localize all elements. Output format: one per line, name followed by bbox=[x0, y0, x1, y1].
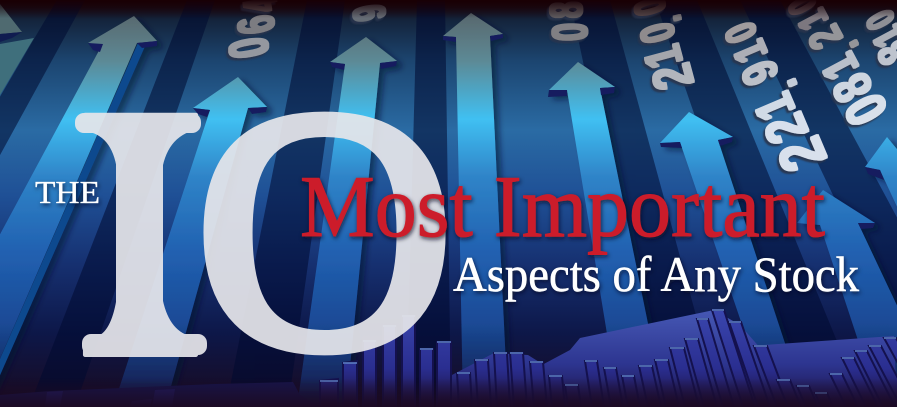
bars bbox=[320, 310, 897, 407]
number column 221.910: 1 bbox=[743, 84, 807, 128]
stock ticker numbers bbox=[216, 0, 897, 181]
number column 081.210: 1 bbox=[788, 2, 837, 37]
number column 081.210 bbox=[781, 0, 897, 136]
arrow 6 bbox=[660, 112, 806, 407]
number column 081.210: 2 bbox=[799, 17, 852, 57]
bar top caps bbox=[320, 310, 896, 393]
arrow: far left fragment bbox=[0, 4, 34, 95]
chart planes bbox=[450, 310, 897, 407]
heading: Aspects of Any Stock: Aspects of Any Stock bbox=[453, 246, 859, 302]
arrow 1 bbox=[0, 16, 157, 407]
number column 210.0: 1 bbox=[632, 39, 694, 74]
number column 08: 8 bbox=[541, 1, 593, 19]
top fade bbox=[0, 0, 897, 18]
number column 064: 6 bbox=[227, 11, 287, 38]
number column 9: 9 bbox=[344, 1, 397, 25]
arrow 2 bbox=[113, 77, 267, 407]
number column 221.910: 2 bbox=[751, 105, 821, 153]
arrow 5 bbox=[548, 62, 665, 407]
heading: THE: THE bbox=[35, 174, 100, 210]
number column far right bbox=[858, 3, 897, 73]
number column 08 bbox=[541, 1, 598, 42]
number column 081.210: 8 bbox=[821, 63, 885, 111]
number column 221.910: 0 bbox=[715, 15, 767, 50]
heading: Most Important: Most Important bbox=[300, 159, 825, 256]
number column 210.0: 0 bbox=[629, 17, 686, 49]
arrow 7 bbox=[797, 190, 897, 407]
number column 210.0 bbox=[623, 0, 706, 96]
number column 221.910: 9 bbox=[732, 52, 790, 92]
bottom bar chart bbox=[0, 310, 897, 407]
number column 081.210: . bbox=[819, 33, 868, 65]
number column 08: 0 bbox=[542, 22, 598, 42]
arrow 3 bbox=[297, 37, 397, 407]
arrow 4 bbox=[443, 13, 508, 407]
bottom fade bbox=[0, 378, 897, 407]
arrow 8 bbox=[865, 137, 897, 407]
number column 210.0: . bbox=[640, 11, 691, 31]
number column 081.210: 1 bbox=[812, 44, 870, 88]
number column 210.0: 2 bbox=[640, 57, 706, 96]
low bars, left bbox=[45, 389, 175, 407]
chart base sheet, left bbox=[0, 382, 320, 407]
number column 221.910 bbox=[715, 15, 841, 181]
number column 221.910: 1 bbox=[724, 33, 778, 69]
number column 064 bbox=[216, 0, 289, 63]
number column 221.910: . bbox=[753, 72, 808, 103]
number column 221.910: 2 bbox=[764, 128, 841, 181]
number column 064: 0 bbox=[216, 33, 281, 63]
